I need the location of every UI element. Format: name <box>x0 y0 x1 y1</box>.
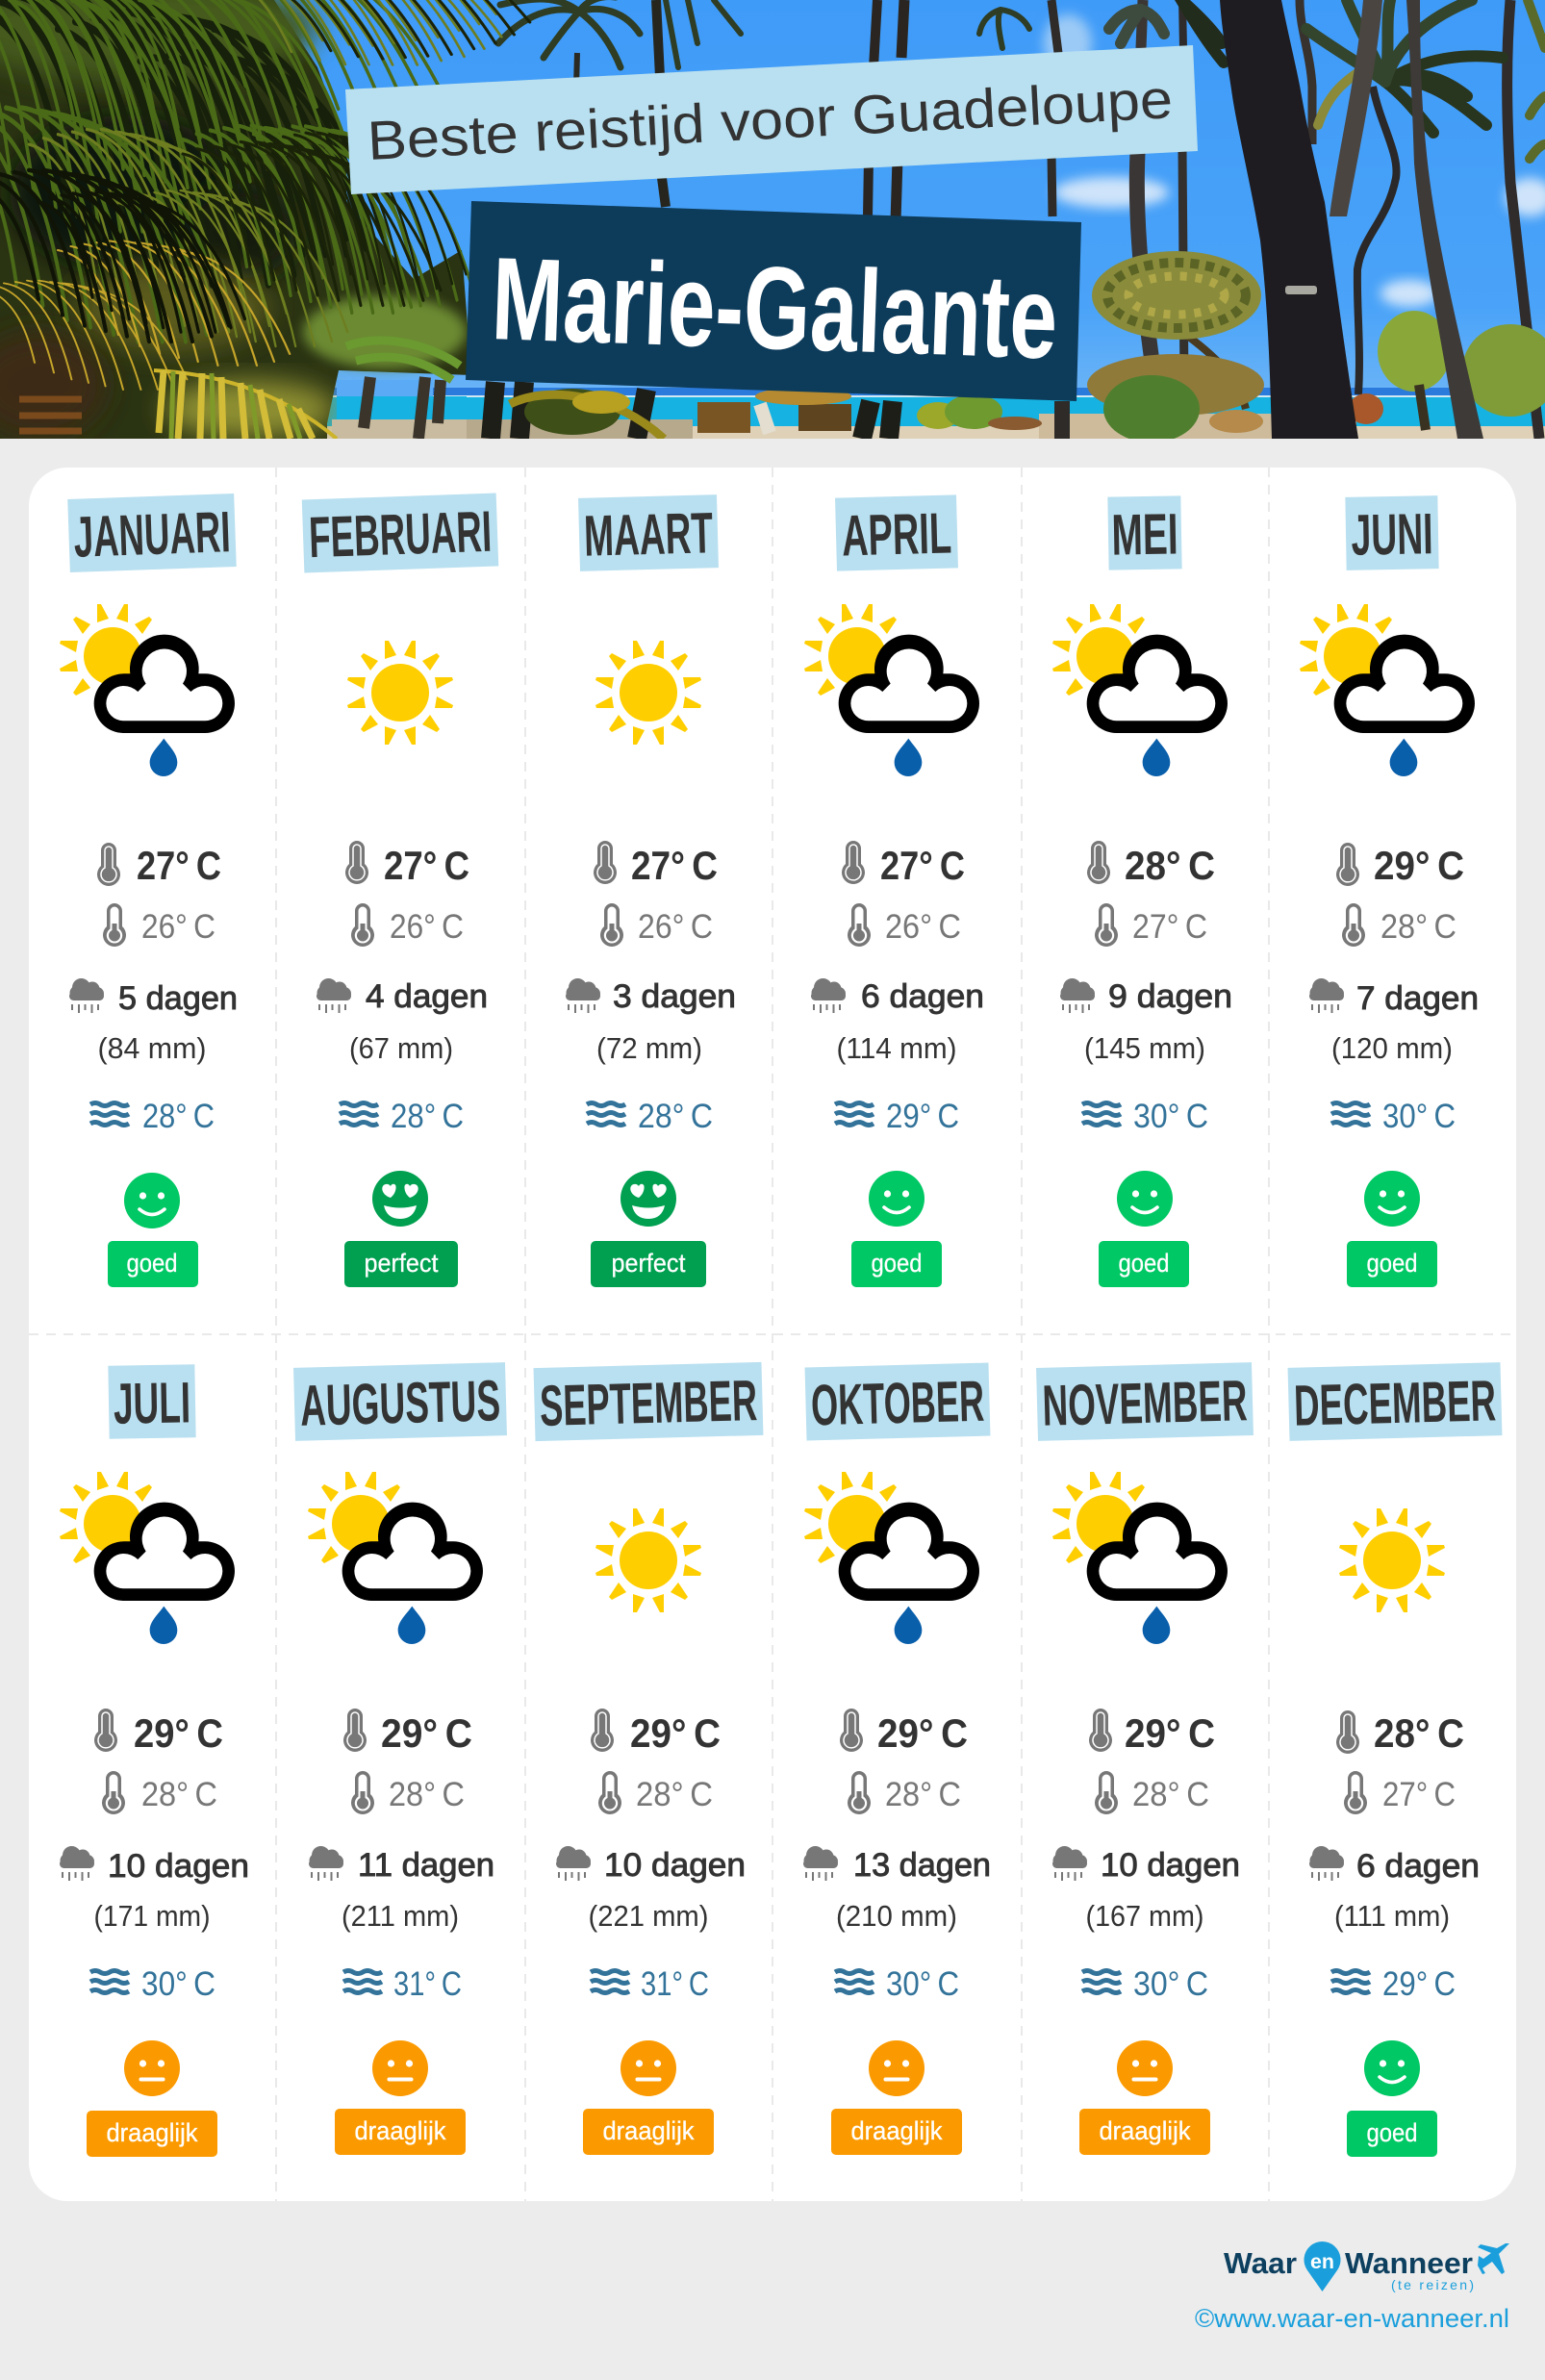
rating: goed <box>1347 2040 1437 2157</box>
month label: MEI <box>1111 501 1178 568</box>
rating: goed: goed <box>872 1249 922 1278</box>
logo: Waar en Wanneer: Waar <box>1224 2246 1297 2280</box>
rating: goed: goed <box>1366 2118 1418 2147</box>
month: april <box>804 494 984 1287</box>
month: mei <box>1052 495 1232 1287</box>
sea temperature <box>340 1098 464 1135</box>
min temperature <box>1095 903 1207 947</box>
min temperature: 26° C <box>141 908 215 946</box>
rain days: 10 dagen <box>108 1848 249 1885</box>
rain days: 6 dagen <box>1356 1848 1480 1885</box>
rating: perfect: perfect <box>364 1249 439 1278</box>
sea temperature: 29° C <box>886 1098 959 1135</box>
rating: goed: goed <box>127 1249 177 1278</box>
hero big palm trunks <box>1330 0 1382 216</box>
rainfall: (211 mm) <box>342 1899 459 1933</box>
month: oktober <box>803 1363 991 2155</box>
month label <box>1345 495 1439 570</box>
rain days: 5 dagen <box>118 980 238 1017</box>
min temperature: 28° C <box>885 1776 961 1813</box>
rating: draaglijk: draaglijk <box>1099 2116 1191 2145</box>
rating: goed <box>1099 1171 1189 1287</box>
min temperature: 28° C <box>389 1776 465 1813</box>
min temperature: 26° C <box>638 908 713 946</box>
min temperature <box>351 1771 465 1814</box>
hero thin palm trunks <box>491 0 1539 439</box>
month: november <box>1036 1362 1254 2155</box>
month: juli <box>60 1364 249 2157</box>
month label: AUGUSTUS <box>299 1368 501 1438</box>
max temperature <box>591 1709 721 1756</box>
month label <box>1036 1362 1254 1441</box>
max temperature: 29° C <box>1374 843 1464 888</box>
icon: map pin <box>1304 2241 1341 2291</box>
icon: sun with cloud and rain <box>308 1472 483 1644</box>
logo: Waar en Wanneer: Wanneer <box>1345 2246 1473 2280</box>
panel: calendar card <box>29 468 1516 2201</box>
month: december <box>1288 1362 1502 2157</box>
rain days: 10 dagen <box>604 1847 746 1884</box>
rain days <box>69 978 238 1017</box>
rain days <box>566 978 736 1015</box>
rain days: 13 dagen <box>853 1847 991 1884</box>
max temperature: 27° C <box>631 843 718 888</box>
month: juni <box>1300 495 1479 1287</box>
month label <box>805 1363 990 1440</box>
icon: sun with cloud and rain <box>60 604 235 776</box>
max temperature <box>1087 841 1215 888</box>
sea temperature: 31° C <box>393 1965 462 2003</box>
sea temperature: 30° C <box>1382 1098 1456 1135</box>
rating: goed: goed <box>1118 1249 1170 1278</box>
icon: sun with cloud and rain <box>1300 604 1475 776</box>
rain days: 10 dagen <box>1101 1847 1240 1884</box>
rating: draaglijk <box>1079 2040 1210 2155</box>
min temperature: 27° C <box>1132 908 1207 946</box>
month label <box>578 494 719 571</box>
title banner: Marie-Galante <box>490 233 1059 384</box>
max temperature <box>1089 1709 1215 1756</box>
sea temperature: 30° C <box>1133 1098 1208 1135</box>
icon: sun with cloud and rain <box>1052 1472 1228 1644</box>
rainfall: (145 mm) <box>1084 1031 1205 1065</box>
rain days: 4 dagen <box>366 978 488 1015</box>
min temperature <box>1342 903 1456 947</box>
rainfall: (167 mm) <box>1085 1899 1204 1933</box>
icon: plane <box>1478 2243 1509 2274</box>
max temperature <box>343 1709 472 1756</box>
month label <box>108 1364 196 1439</box>
rain days <box>811 978 984 1015</box>
hero photo: palm beach <box>0 0 1545 443</box>
rain days: 6 dagen <box>861 978 984 1015</box>
rain days: 3 dagen <box>613 978 736 1015</box>
max temperature: 29° C <box>1125 1710 1215 1756</box>
rainfall: (111 mm) <box>1334 1899 1450 1933</box>
month: januari <box>60 494 238 1287</box>
month label: SEPTEMBER <box>539 1368 758 1438</box>
rating: goed: goed <box>1366 1249 1418 1278</box>
sea temperature <box>1082 1098 1208 1135</box>
sea temperature: 28° C <box>638 1098 713 1135</box>
min temperature: 27° C <box>1382 1776 1456 1813</box>
sea temperature <box>1331 1098 1456 1135</box>
sea temperature <box>591 1965 709 2003</box>
min temperature: 26° C <box>885 908 961 946</box>
logo: Waar en Wanneer <box>1224 2241 1509 2292</box>
max temperature <box>97 843 221 888</box>
min temperature <box>103 903 215 947</box>
month label: APRIL <box>841 501 952 568</box>
sea temperature <box>835 1098 959 1135</box>
sea temperature: 30° C <box>141 1965 215 2003</box>
rainfall: (120 mm) <box>1331 1031 1453 1065</box>
rating: goed <box>851 1171 942 1287</box>
sea temperature: 28° C <box>142 1098 215 1135</box>
max temperature: 27° C <box>137 843 221 888</box>
min temperature: 28° C <box>1132 1776 1209 1813</box>
max temperature: 28° C <box>1374 1710 1464 1756</box>
logo: Waar en Wanneer: (te reizen) <box>1391 2277 1474 2292</box>
min temperature: 28° C <box>141 1776 217 1813</box>
rating: perfect <box>591 1171 706 1287</box>
rain days <box>1309 1846 1480 1885</box>
month label: NOVEMBER <box>1042 1368 1248 1438</box>
max temperature <box>1336 1710 1464 1756</box>
max temperature: 28° C <box>1125 843 1215 888</box>
icon: map pin: en <box>1310 2251 1334 2273</box>
month label <box>302 493 498 573</box>
rating: draaglijk <box>87 2040 217 2157</box>
rainfall: (72 mm) <box>596 1031 702 1065</box>
rating: draaglijk: draaglijk <box>602 2116 695 2145</box>
rainfall: (114 mm) <box>837 1031 956 1065</box>
sea temperature: 29° C <box>1382 1965 1456 2003</box>
rainfall: (67 mm) <box>349 1031 453 1065</box>
min temperature <box>848 903 961 947</box>
max temperature <box>594 841 718 888</box>
rainfall: (210 mm) <box>836 1899 957 1933</box>
max temperature: 29° C <box>877 1710 968 1756</box>
max temperature <box>840 1709 968 1756</box>
month label <box>293 1362 507 1441</box>
rain days <box>1309 978 1479 1017</box>
rating: draaglijk: draaglijk <box>106 2118 198 2147</box>
rain days <box>1060 978 1232 1015</box>
hero round tree <box>1087 251 1545 443</box>
max temperature <box>1336 843 1464 888</box>
max temperature <box>94 1709 223 1756</box>
hero left palm fronds <box>0 0 533 439</box>
rainfall: (84 mm) <box>98 1031 206 1065</box>
rating: draaglijk: draaglijk <box>354 2116 446 2145</box>
rating: goed <box>108 1173 198 1287</box>
month label: OKTOBER <box>810 1369 985 1437</box>
max temperature: 27° C <box>384 843 469 888</box>
sea temperature <box>835 1965 959 2003</box>
month label: MAART <box>583 500 714 569</box>
month: maart <box>566 494 736 1287</box>
rain days <box>317 978 488 1015</box>
icon: sun <box>595 1508 701 1612</box>
sea temperature: 30° C <box>1133 1965 1208 2003</box>
month: augustus <box>293 1362 507 2155</box>
min temperature <box>600 903 713 947</box>
sea temperature <box>90 1098 215 1135</box>
month label: JULI <box>113 1370 191 1436</box>
sea temperature <box>587 1098 713 1135</box>
month: februari <box>302 493 498 1287</box>
sea temperature <box>90 1965 215 2003</box>
subtitle banner: Beste reistijd voor Guadeloupe <box>366 68 1175 172</box>
min temperature <box>598 1771 713 1814</box>
min temperature: 26° C <box>390 908 464 946</box>
max temperature: 27° C <box>880 843 965 888</box>
sea temperature <box>343 1965 462 2003</box>
min temperature: 28° C <box>636 1776 713 1813</box>
rain days: 11 dagen <box>358 1847 494 1884</box>
min temperature <box>102 1771 217 1814</box>
max temperature: 29° C <box>381 1710 472 1756</box>
min temperature: 28° C <box>1380 908 1456 946</box>
month label: JUNI <box>1351 501 1433 568</box>
subtitle banner <box>345 45 1198 194</box>
rating: perfect: perfect <box>612 1249 686 1278</box>
rating: draaglijk <box>831 2040 962 2155</box>
min temperature <box>1344 1771 1456 1814</box>
sea temperature: 30° C <box>886 1965 959 2003</box>
month label: JANUARI <box>72 499 232 570</box>
icon: sun <box>595 641 701 745</box>
max temperature <box>345 841 469 888</box>
rating: goed <box>1347 1171 1437 1287</box>
max temperature <box>842 841 965 888</box>
month label <box>1107 495 1182 570</box>
month label: FEBRUARI <box>308 499 493 570</box>
sea temperature: 31° C <box>641 1965 709 2003</box>
icon: sun with cloud and rain <box>804 604 979 776</box>
source url: ©www.waar-en-wanneer.nl <box>1195 2304 1509 2333</box>
rating: draaglijk <box>335 2040 466 2155</box>
rating: perfect <box>344 1171 458 1287</box>
icon: sun <box>1339 1508 1445 1612</box>
icon: sun with cloud and rain <box>1052 604 1228 776</box>
icon: sun <box>347 641 453 745</box>
sea temperature <box>1331 1965 1456 2003</box>
hero bottom beach details <box>510 388 1042 439</box>
icon: sun with cloud and rain <box>804 1472 979 1644</box>
max temperature: 29° C <box>630 1710 721 1756</box>
rating: draaglijk <box>583 2040 714 2155</box>
min temperature <box>351 903 464 947</box>
rating: draaglijk: draaglijk <box>850 2116 943 2145</box>
rainfall: (171 mm) <box>94 1899 210 1933</box>
month label <box>67 494 237 572</box>
month label <box>835 494 958 571</box>
rain days: 7 dagen <box>1356 980 1479 1017</box>
hero palm crowns <box>498 0 1545 159</box>
month: september <box>534 1362 763 2155</box>
rainfall: (221 mm) <box>589 1899 708 1933</box>
title banner <box>466 201 1081 401</box>
rain days <box>60 1846 249 1885</box>
max temperature: 29° C <box>134 1710 223 1756</box>
min temperature <box>848 1771 961 1814</box>
icon: sun with cloud and rain <box>60 1472 235 1644</box>
sea temperature <box>1082 1965 1208 2003</box>
sea temperature: 28° C <box>391 1098 464 1135</box>
month label <box>534 1362 763 1441</box>
rain days: 9 dagen <box>1108 978 1232 1015</box>
min temperature <box>1095 1771 1209 1814</box>
